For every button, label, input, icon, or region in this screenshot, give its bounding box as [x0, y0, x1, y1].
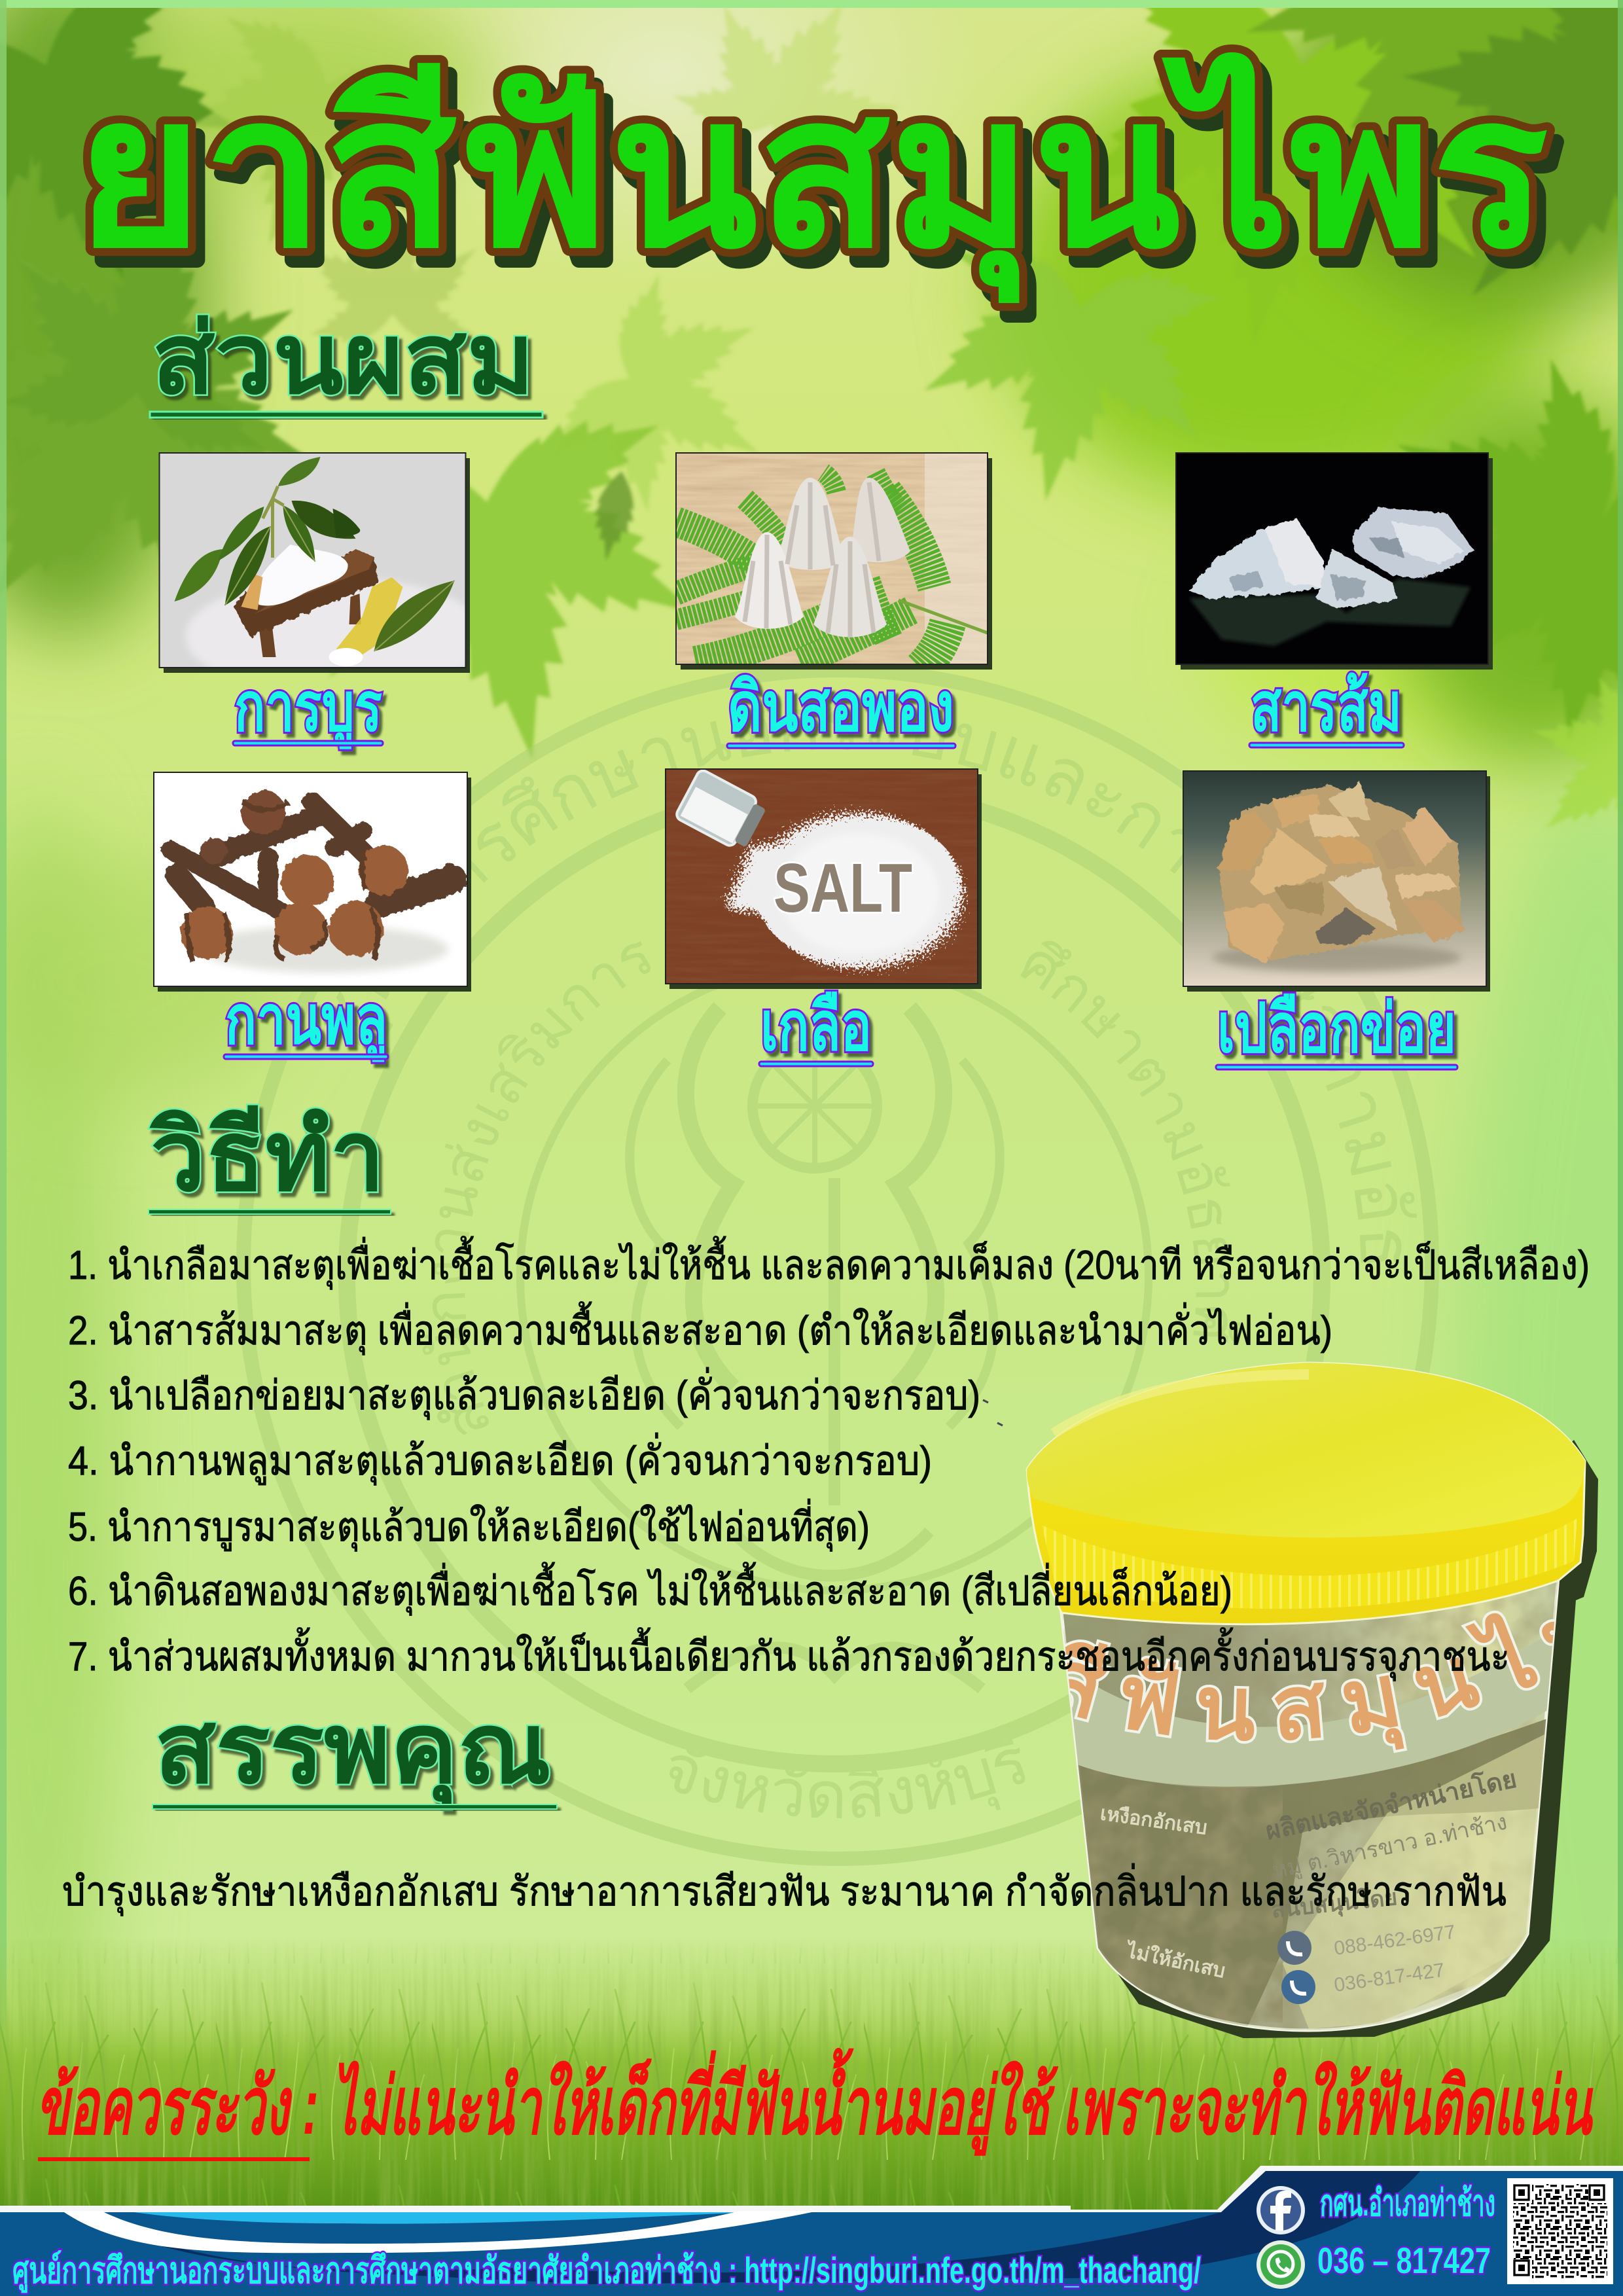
icon: facebook [1257, 2186, 1305, 2234]
icon: whatsapp [1257, 2240, 1305, 2289]
contact: phone: 036 – 817427 [1317, 2240, 1491, 2281]
photo: เกลือ salt spill [666, 768, 982, 989]
title: ยาสีฟันสมุนไพร [85, 62, 1558, 316]
jar lid [1027, 1363, 1585, 1624]
steps: วิธีทำ list: 4. นำกานพลูมาสะตุแล้วบดละเอียด (คั่วจนกว่าจะกรอบ) [68, 1433, 932, 1485]
photo: เกลือ salt spill: SALT [774, 850, 912, 927]
heading: วิธีทำ: วิธีทำ [149, 1101, 385, 1211]
text: benefits: บำรุงและรักษาเหงือกอักเสบ รักษาอาการเสียวฟัน ระมานาค กำจัดกลิ่นปาก และรักษารากฟัน [62, 1863, 1507, 1916]
jar body and label: ผลิตและจัดจำหน่ายโดย [1263, 1764, 1519, 1846]
label: สารส้ม: สารส้ม [1251, 670, 1402, 745]
label: เกลือ: เกลือ [760, 989, 872, 1065]
label: เปลือกข่อย: เปลือกข่อย [1217, 991, 1456, 1067]
label: การบูร: การบูร [234, 670, 382, 749]
footer band [0, 2166, 1623, 2296]
heading: สรรพคุณ: สรรพคุณ [154, 1693, 551, 1810]
steps: วิธีทำ list [68, 1236, 1590, 1681]
jar body and label: 088-462-6977 [1332, 1921, 1457, 1960]
label: กานพลู: กานพลู [225, 982, 387, 1062]
jar body and label [1060, 1581, 1560, 2032]
watermark: school emblem: จังหวัดสิงห์บุรี [653, 1724, 1039, 1833]
title: ยาสีฟันสมุนไพร [76, 50, 1548, 304]
watermark: school emblem [0, 0, 1432, 1859]
steps: วิธีทำ list: 2. นำสารส้มมาสะตุ เพื่อลดความชื้นและสะอาด (ตำให้ละเอียดและนำมาคั่วไฟอ่อน) [68, 1301, 1332, 1355]
heading: ส่วนผสม: ส่วนผสม [152, 304, 535, 414]
background: grass strip [0, 1937, 1623, 2212]
white swoosh [62, 2211, 818, 2253]
jar shadow [1106, 1440, 1598, 2038]
jar body and label: สนับสนุนโดย [1270, 1884, 1399, 1924]
photo: เปลือกข่อย bark pieces [1183, 771, 1490, 992]
label: ดินสอพอง: ดินสอพอง [728, 670, 954, 745]
jar body and label: 036-817-427 [1332, 1960, 1446, 1996]
steps: วิธีทำ list: 6. นำดินสอพองมาสะตุเพื่อฆ่าเชื้อโรค ไม่ให้ชื้นและสะอาด (สีเปลี่ยนเล็กน้อย) [68, 1562, 1232, 1615]
contact: page name: กศน.อำเภอท่าช้าง [1320, 2182, 1495, 2223]
jar body and label: ไม่ให้อักเสบ [1123, 1939, 1228, 1982]
steps: วิธีทำ list: 3. นำเปลือกข่อยมาสะตุแล้วบดละเอียด (คั่วจนกว่าจะกรอบ) [68, 1367, 980, 1420]
steps: วิธีทำ list: 5. นำการบูรมาสะตุแล้วบดให้ละเอียด(ใช้ไฟอ่อนที่สุด) [68, 1499, 870, 1551]
photo: กานพลู cloves [154, 772, 471, 992]
product jar [160, 1361, 1598, 2038]
watermark: school emblem: สำนักงานส่งเสริมการ [420, 941, 651, 1435]
jar body and label: หมู่ ต.วิหารขาว อ.ท่าช้าง [1270, 1810, 1510, 1884]
photo: ดินสอพอง chalk cones [676, 453, 992, 670]
photo: สารส้ม alum crystals [1176, 453, 1493, 670]
qr code [1507, 2178, 1613, 2284]
jar body and label: เหงือกอักเสบ [1099, 1803, 1209, 1839]
photo: การบูร camphor [160, 453, 487, 695]
title: ยาสีฟันสมุนไพร [76, 50, 1548, 304]
